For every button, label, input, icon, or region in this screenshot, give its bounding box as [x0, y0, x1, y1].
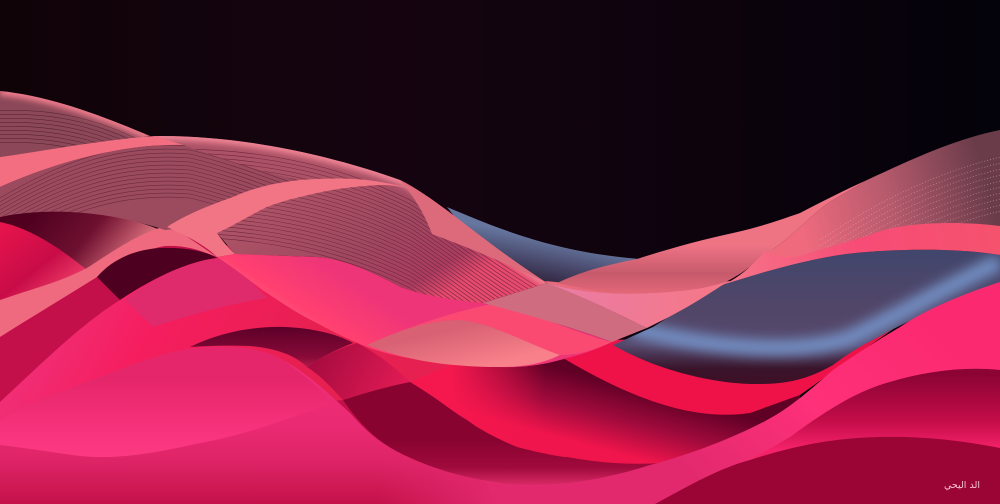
mesh pale wedge: [400, 180, 547, 283]
right crimson valley: [745, 369, 1000, 463]
left pale ribbon: [0, 225, 217, 337]
bottom colour blend: [380, 440, 505, 504]
right dark crimson field: [400, 340, 800, 470]
right dotted mesh: [772, 130, 1000, 253]
left red blob: [0, 222, 87, 300]
blue main wave: [613, 250, 1000, 384]
top-left mesh wave: [0, 91, 150, 157]
centre pale ribbon: [547, 282, 727, 328]
hill shaded fold: [125, 258, 267, 327]
left middle dark arch: [190, 327, 353, 367]
ribbon seam patch right: [755, 248, 810, 272]
main pale ribbon: [217, 254, 612, 367]
central lens ribbon: [367, 320, 560, 367]
pink sweep band: [483, 282, 1000, 504]
top-left pale ribbon: [0, 136, 183, 187]
central mesh wave: [0, 145, 298, 230]
middle dark arch: [97, 248, 217, 300]
right upper mesh ribbon: [557, 180, 867, 295]
front hill lighter fold: [0, 347, 333, 457]
left dark arch: [0, 211, 165, 300]
lower crimson field: [655, 437, 1000, 504]
left crimson base: [0, 215, 500, 504]
central red glow: [357, 343, 600, 470]
deep crimson patch: [343, 382, 800, 490]
watermark: الد اليحي: [944, 480, 980, 491]
front pink hill: [0, 347, 500, 504]
red band under blue: [560, 310, 920, 415]
crossing pale ribbon: [167, 178, 417, 257]
mid crimson facet: [307, 343, 410, 400]
centre bright pink band: [367, 303, 612, 355]
right pink ribbon above blue: [725, 223, 1000, 284]
ribbon underlay filling seam: [545, 281, 730, 305]
big pink hill: [0, 257, 500, 430]
back mesh hump: [155, 136, 547, 303]
blue wave behind mesh: [447, 207, 640, 300]
centre mesh panel: [483, 283, 647, 342]
